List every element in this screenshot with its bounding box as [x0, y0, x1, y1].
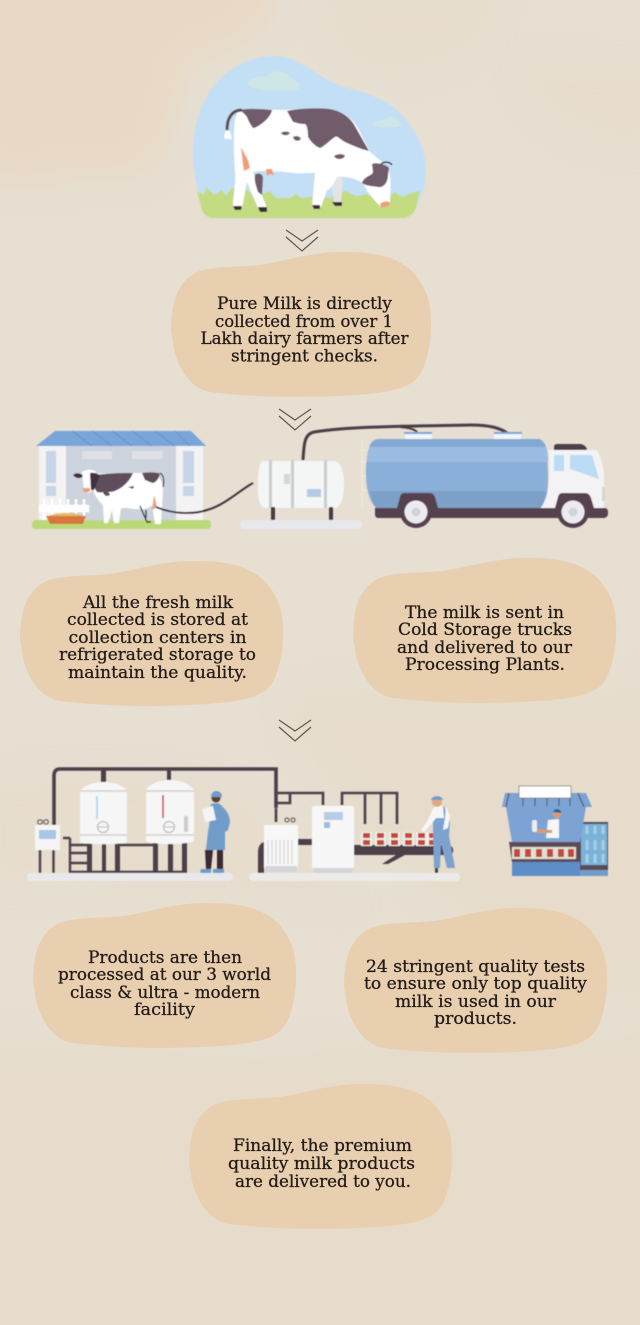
illustration: processing tanks — [27, 769, 276, 881]
text: step five: to ensure only top quality — [364, 974, 588, 993]
ladder — [362, 440, 367, 507]
panel: fresh milk storage — [20, 561, 283, 706]
shop awning — [502, 793, 592, 807]
small cow — [90, 473, 163, 524]
barn walls — [39, 446, 203, 520]
pipes — [54, 769, 276, 826]
text: step six: quality milk products — [228, 1154, 415, 1173]
arrow: chevrons 2 — [279, 409, 311, 430]
text: step five: products. — [434, 1009, 517, 1028]
text: step three — [397, 603, 572, 674]
chassis — [375, 493, 608, 518]
text: step three: The milk is sent in — [405, 603, 564, 622]
floor — [249, 873, 460, 881]
text: step two: All the fresh milk — [82, 593, 234, 612]
grass — [197, 187, 420, 218]
clouds — [248, 71, 401, 127]
barn roof — [36, 431, 206, 446]
spots — [240, 108, 389, 195]
text: step six: are delivered to you. — [235, 1172, 411, 1191]
text: step one: collected from over 1 — [215, 312, 393, 331]
text: step three: and delivered to our — [397, 638, 572, 657]
illustration: grazing cow — [193, 56, 426, 218]
wheels — [400, 496, 432, 528]
panel: cold storage trucks — [353, 558, 616, 703]
text: step two: refrigerated storage to — [59, 645, 256, 664]
cooler — [580, 822, 608, 876]
text: step six — [228, 1136, 415, 1191]
text: step two: collection centers in — [68, 628, 247, 647]
text: step one: stringent checks. — [231, 346, 378, 366]
shopkeeper — [546, 819, 559, 838]
text: step one: Lakh dairy farmers after — [200, 329, 409, 348]
cow head — [82, 470, 96, 493]
sky backdrop — [193, 56, 426, 210]
milk tank — [258, 461, 344, 508]
boiler — [264, 825, 298, 868]
illustration: farm and milking cow — [32, 425, 608, 529]
text: step five: milk is used in our — [395, 992, 556, 1011]
udder and nose — [241, 147, 250, 171]
horn — [381, 162, 392, 165]
hooves — [233, 205, 320, 212]
text: step five — [364, 957, 588, 1028]
text: step three: Cold Storage trucks — [398, 620, 572, 639]
far legs — [331, 175, 343, 203]
text: step three: Processing Plants. — [405, 655, 565, 674]
text: step four — [58, 948, 271, 1019]
scientist — [206, 803, 230, 850]
control panel — [35, 825, 60, 850]
cow body — [233, 108, 390, 208]
panel: quality tests — [344, 908, 607, 1053]
text: step five: 24 stringent quality tests — [366, 957, 585, 976]
text: step two: maintain the quality. — [68, 663, 247, 682]
truck connection pipe — [303, 425, 507, 460]
tanker hatches — [405, 432, 521, 439]
milking hose — [156, 483, 253, 513]
text: step two: collected is stored at — [67, 610, 248, 629]
panel: processing facility — [33, 903, 296, 1048]
text: step four: processed at our 3 world — [58, 965, 271, 984]
tail — [227, 110, 242, 130]
ground — [32, 520, 211, 529]
truck cab — [541, 450, 604, 508]
panel: pure milk collected — [171, 252, 431, 397]
shop sign — [519, 786, 571, 798]
pipes — [276, 793, 397, 824]
tanks — [80, 782, 127, 844]
tank frame — [40, 838, 187, 873]
arrow: chevrons 3 — [279, 720, 311, 741]
text: step one: Pure Milk is directly — [217, 294, 393, 313]
conveyor — [354, 845, 453, 855]
floor — [27, 873, 233, 881]
illustration: packaging line — [249, 793, 460, 881]
shop body — [506, 807, 586, 876]
text: step two — [59, 593, 256, 682]
tanker body — [366, 439, 548, 508]
text: step one — [200, 294, 409, 366]
machine — [312, 806, 354, 868]
arrow: chevrons 1 — [286, 230, 318, 251]
illustration: retail shop — [502, 786, 608, 876]
text: step four: Products are then — [88, 948, 242, 967]
text: step four: facility — [134, 1000, 196, 1019]
trough — [46, 516, 86, 524]
packets — [361, 832, 438, 846]
cow details — [152, 495, 157, 510]
panel: delivered to you — [189, 1084, 452, 1229]
text: step four: class & ultra - modern — [70, 983, 260, 1002]
worker — [433, 806, 455, 868]
text: step six: Finally, the premium — [233, 1136, 412, 1155]
fence — [40, 499, 88, 520]
